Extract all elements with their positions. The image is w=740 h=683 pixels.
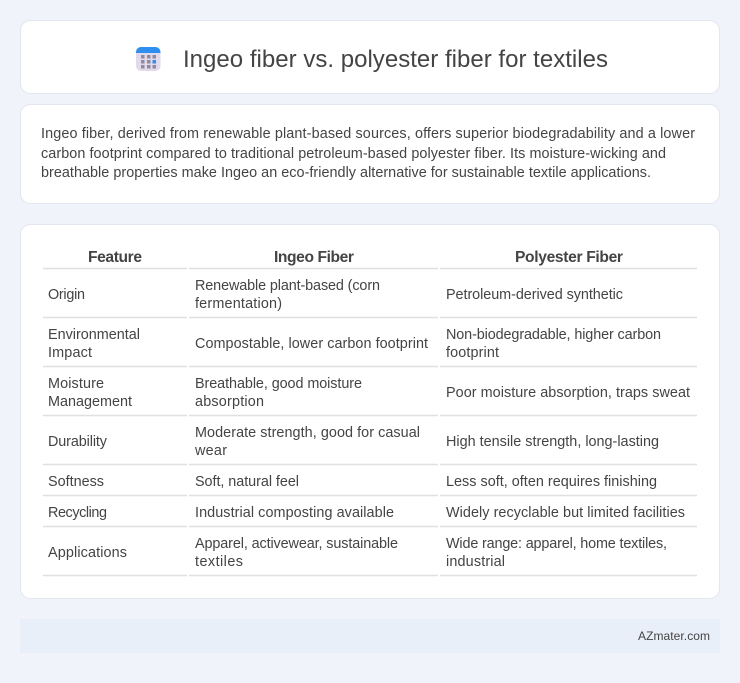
row: softness: Soft, natural feel: [195, 474, 299, 490]
table row lines: [43, 268, 697, 576]
table header: Feature: [88, 249, 142, 266]
row: moisture management: [48, 376, 690, 410]
intro paragraph: breathable properties make Ingeo an eco-friendly alternative for sustainable textile applications.: [41, 165, 651, 181]
row: durability: wear: [194, 443, 227, 459]
row: moisture management: absorption: [195, 394, 264, 410]
intro paragraph: carbon footprint compared to traditional petroleum-based polyester fiber. Its moisture-wicking and: [41, 146, 666, 162]
row: environmental impact: Non-biodegradable, higher carbon: [446, 327, 661, 343]
row: recycling: Widely recyclable but limited facilities: [446, 505, 685, 521]
row: origin: Petroleum-derived synthetic: [446, 287, 623, 303]
row: softness: [48, 474, 657, 490]
row: environmental impact: Environmental: [48, 327, 140, 343]
icon: calendar: [136, 47, 160, 71]
row: moisture management: Breathable, good moisture: [195, 376, 362, 392]
row: durability: [48, 425, 659, 459]
row: durability: High tensile strength, long-lasting: [446, 434, 659, 450]
row: environmental impact: Compostable, lower carbon footprint: [195, 336, 428, 352]
row: environmental impact: Impact: [48, 345, 92, 361]
row: recycling: Recycling: [48, 505, 107, 521]
table header: [88, 249, 623, 266]
row: moisture management: Moisture: [48, 376, 104, 392]
row: origin: fermentation): [195, 296, 282, 312]
row: applications: Wide range: apparel, home textiles,: [446, 536, 667, 552]
intro paragraph: Ingeo fiber, derived from renewable plant-based sources, offers superior biodegradability and a lower: [41, 126, 695, 142]
row: moisture management: Management: [48, 394, 132, 410]
row: moisture management: Poor moisture absorption, traps sweat: [446, 385, 690, 401]
intro paragraph: [41, 126, 695, 181]
title: Ingeo fiber vs. polyester fiber for textiles: [183, 46, 608, 73]
row: applications: Applications: [48, 545, 127, 561]
row: recycling: [48, 505, 685, 521]
row: environmental impact: [48, 327, 661, 361]
row: recycling: Industrial composting available: [195, 505, 394, 521]
row: applications: industrial: [446, 554, 505, 570]
row: softness: Less soft, often requires finishing: [446, 474, 657, 490]
footer credit: AZmater.com: [638, 629, 710, 643]
panel: introduction: [20, 104, 720, 204]
row: origin: Renewable plant-based (corn: [195, 278, 380, 294]
row: softness: Softness: [48, 474, 104, 490]
table header: Ingeo Fiber: [274, 249, 354, 266]
footer bar: [20, 619, 720, 653]
panel: comparison table: [20, 224, 720, 598]
table header: Polyester Fiber: [515, 249, 623, 266]
row: environmental impact: footprint: [446, 345, 499, 361]
row: origin: [48, 278, 623, 312]
row: applications: textiles: [195, 554, 243, 570]
row: durability: Moderate strength, good for casual: [195, 425, 420, 441]
row: applications: Apparel, activewear, sustainable: [195, 536, 398, 552]
row: applications: [48, 536, 667, 570]
row: origin: Origin: [48, 287, 85, 303]
panel: title card: [20, 20, 720, 94]
row: durability: Durability: [48, 434, 108, 450]
